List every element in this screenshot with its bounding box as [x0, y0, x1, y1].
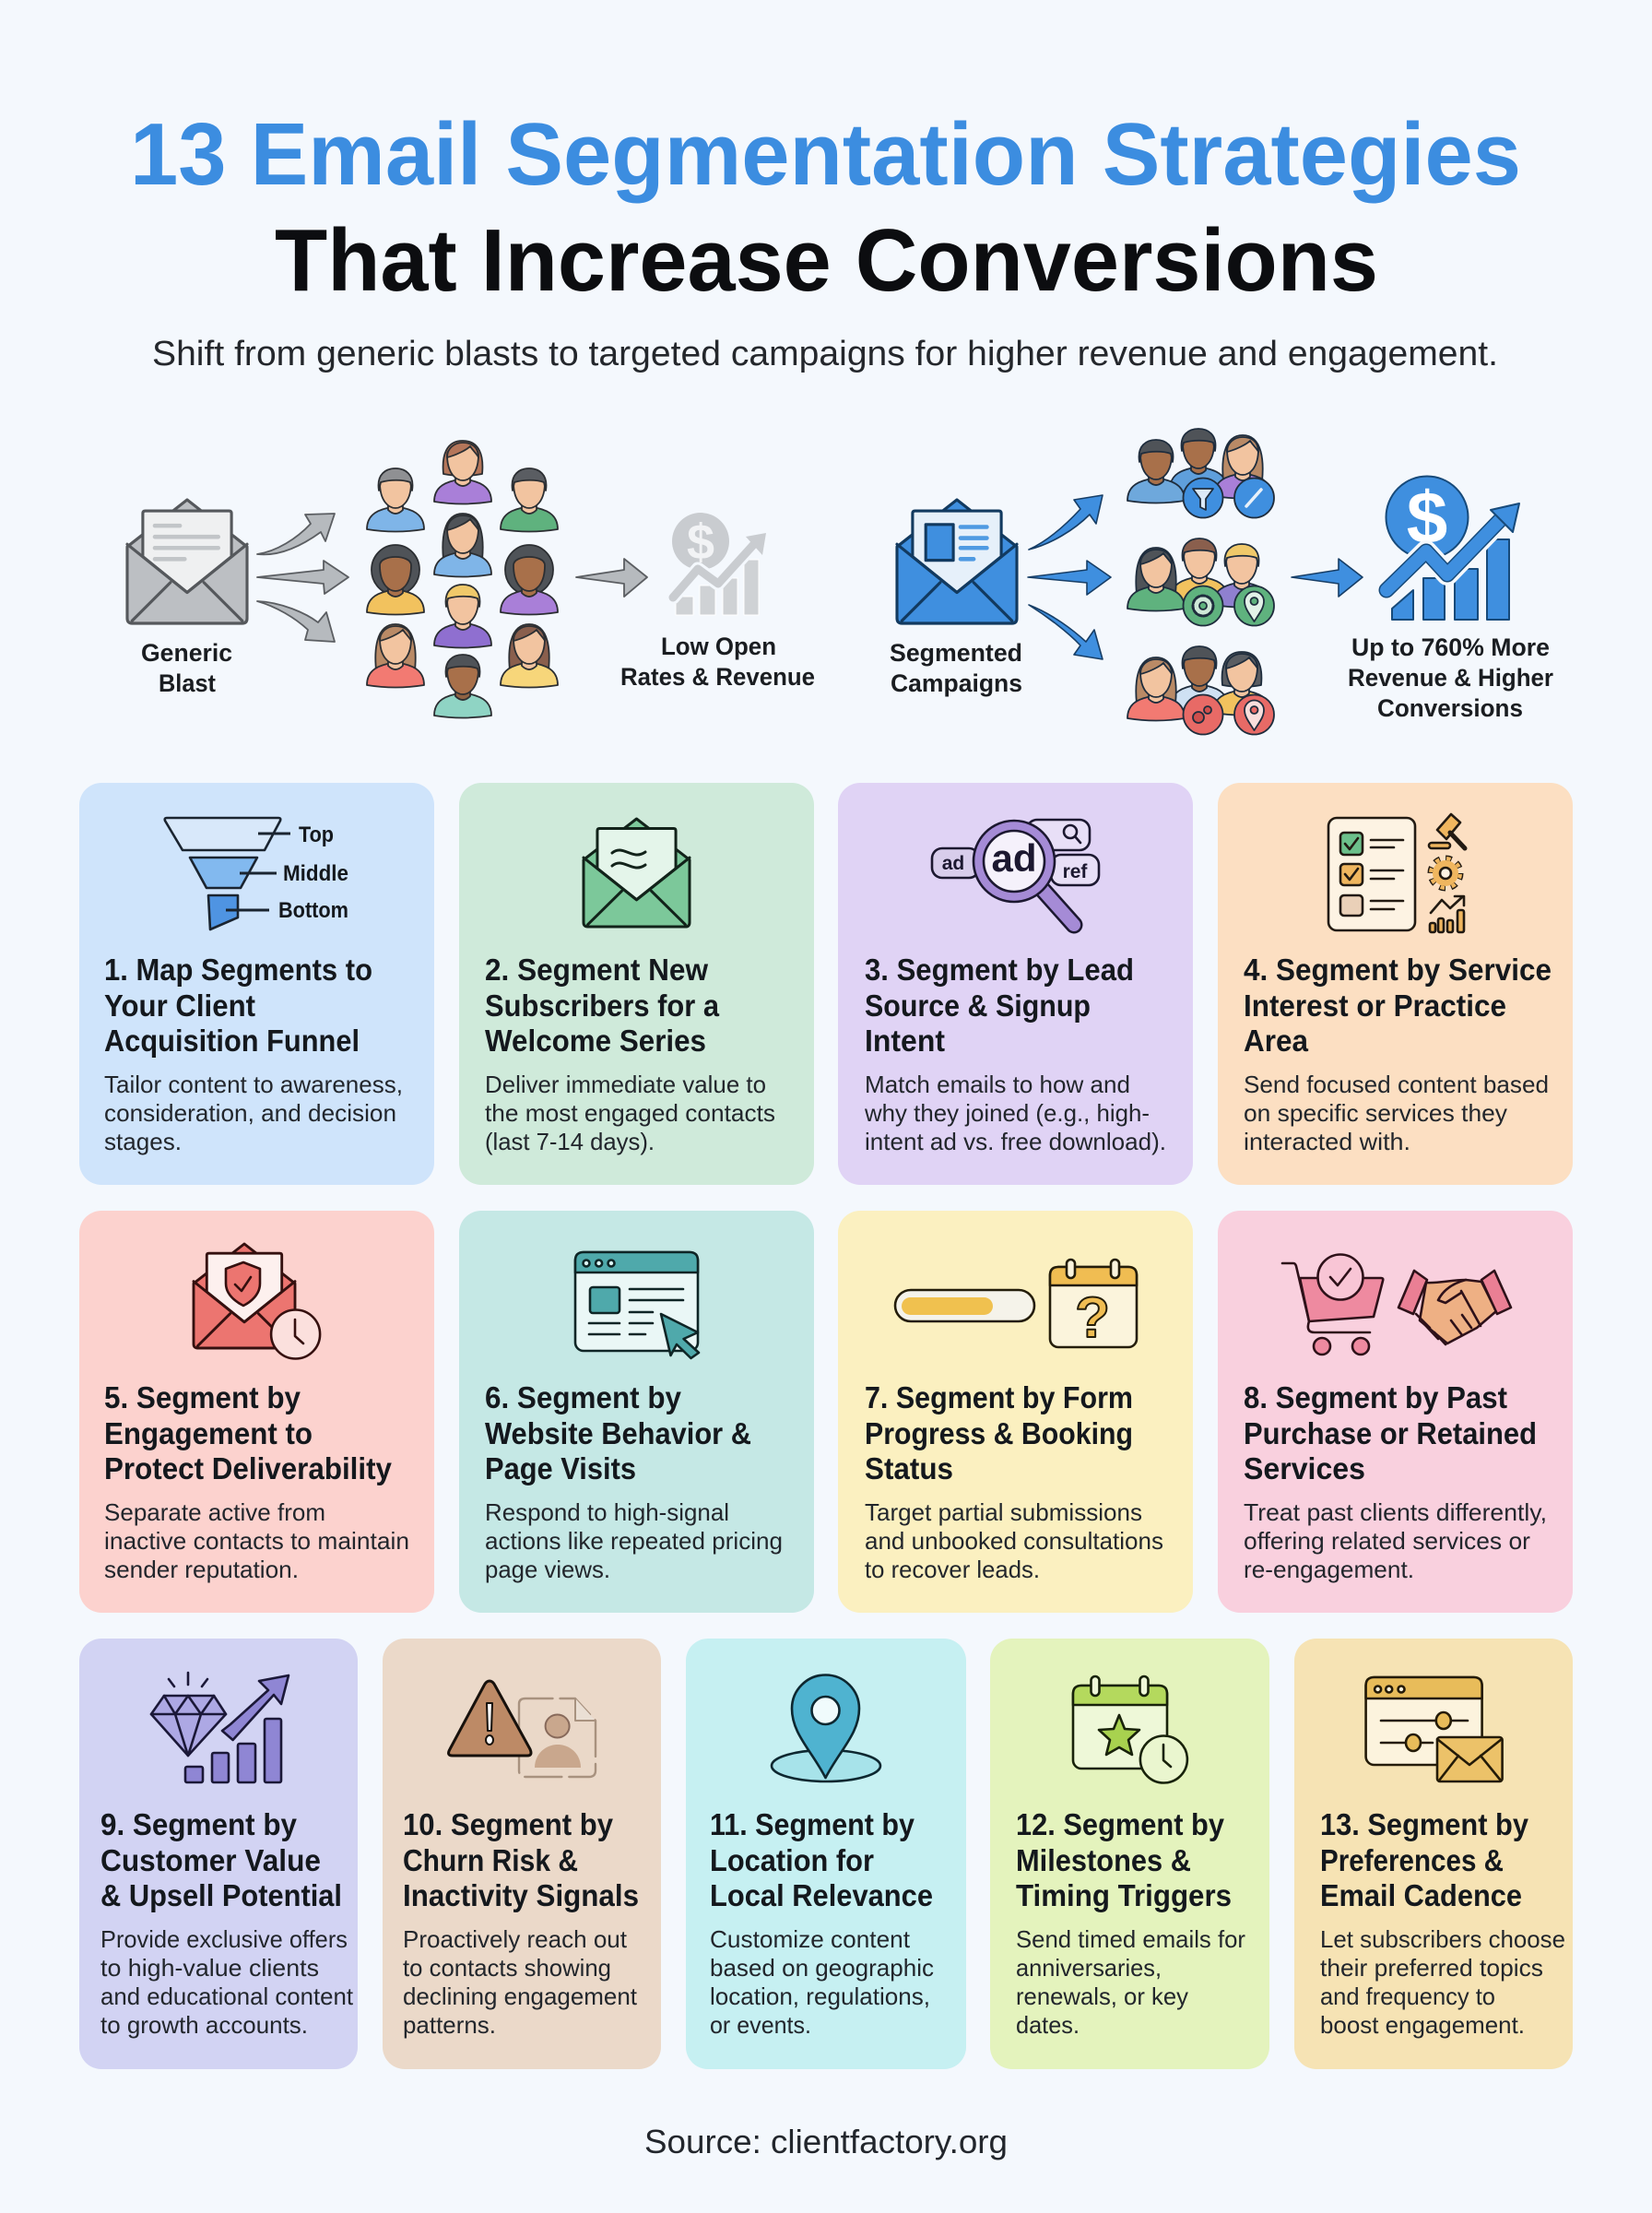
heading: 10. Segment by	[403, 1807, 614, 1841]
heading: Welcome Series	[485, 1024, 706, 1058]
icon: blue revenue chart: $	[1407, 477, 1447, 559]
text block	[1244, 1498, 1547, 1583]
arrow: blue to result	[1292, 559, 1363, 597]
text block	[485, 1071, 775, 1155]
icon: cart and handshake	[1282, 1254, 1511, 1355]
heading: Progress & Booking	[865, 1416, 1133, 1450]
heading: Customer Value	[100, 1843, 321, 1877]
heading	[403, 1807, 639, 1912]
text block: Customize content	[710, 1925, 911, 1953]
text block: to recover leads.	[865, 1556, 1040, 1583]
text block: re-engagement.	[1244, 1556, 1414, 1583]
text block	[1016, 1925, 1245, 2039]
icon: funnel: Middle	[283, 861, 348, 886]
icon: progress bar and calendar	[895, 1260, 1137, 1350]
label: generic blast	[141, 639, 232, 697]
subtitle: Shift from generic blasts to targeted campaigns for higher revenue and engagement.	[152, 335, 1498, 373]
text block: Provide exclusive offers	[100, 1925, 348, 1953]
label: up to 760% more: Revenue & Higher	[1348, 664, 1553, 692]
heading: Acquisition Funnel	[104, 1024, 360, 1058]
text block: location, regulations,	[710, 1982, 930, 2010]
text block: actions like repeated pricing	[485, 1527, 783, 1555]
heading: Churn Risk &	[403, 1843, 578, 1877]
text block: based on geographic	[710, 1954, 934, 1982]
heading: Timing Triggers	[1016, 1878, 1232, 1912]
title	[130, 105, 1521, 310]
text block: why they joined (e.g., high-	[864, 1099, 1150, 1127]
text block: offering related services or	[1244, 1527, 1530, 1555]
text block: Let subscribers choose	[1320, 1925, 1565, 1953]
text block	[1320, 1925, 1565, 2039]
heading: Email Cadence	[1320, 1878, 1522, 1912]
heading	[710, 1807, 933, 1912]
text block: and unbooked consultations	[865, 1527, 1163, 1555]
heading	[485, 953, 720, 1058]
text block: sender reputation.	[104, 1556, 299, 1583]
label: low open rates: Rates & Revenue	[620, 663, 815, 691]
panel: card 13	[1294, 1639, 1573, 2069]
icon: magnifier with ad tags: ad	[991, 836, 1037, 880]
label: low open rates: Low Open	[661, 633, 776, 660]
text block: interacted with.	[1244, 1128, 1410, 1155]
label: up to 760% more: Up to 760% More	[1351, 633, 1550, 661]
text block: renewals, or key	[1016, 1982, 1188, 2010]
panel: card 3	[838, 783, 1193, 1185]
label: generic blast: Blast	[159, 669, 216, 697]
heading: 6. Segment by	[485, 1380, 682, 1414]
heading	[100, 1807, 342, 1912]
heading	[104, 953, 372, 1058]
heading	[1320, 1807, 1529, 1912]
icon: gray revenue chart	[672, 513, 766, 615]
heading	[865, 1380, 1133, 1485]
people group: middle segment	[1127, 538, 1274, 625]
panel: card 12	[990, 1639, 1269, 2069]
icon: green envelope	[584, 819, 690, 927]
text block: to growth accounts.	[100, 2011, 308, 2039]
people group: top segment	[1127, 429, 1274, 518]
text block	[710, 1925, 934, 2039]
panel: card 2	[459, 783, 814, 1185]
heading	[865, 953, 1134, 1058]
text block	[104, 1071, 403, 1155]
heading: 9. Segment by	[100, 1807, 298, 1841]
text block: or events.	[710, 2011, 811, 2039]
heading	[1016, 1807, 1232, 1912]
text block: Send focused content based	[1244, 1071, 1549, 1098]
heading: Website Behavior &	[485, 1416, 751, 1450]
panel: card 10	[383, 1639, 661, 2069]
text block	[100, 1925, 354, 2039]
panel: card 1	[79, 783, 434, 1185]
label: up to 760% more	[1348, 633, 1553, 722]
arrow: gray to result	[576, 559, 647, 597]
source footer: Source: clientfactory.org	[644, 2123, 1008, 2160]
heading: Engagement to	[104, 1416, 313, 1450]
icon: location pin	[772, 1675, 880, 1781]
text block: Deliver immediate value to	[485, 1071, 766, 1098]
heading: Milestones &	[1016, 1843, 1191, 1877]
heading: Status	[865, 1451, 953, 1485]
icon: checklist with gavel, gear, chart	[1328, 814, 1465, 932]
heading	[1244, 1380, 1537, 1485]
heading: 5. Segment by	[104, 1380, 301, 1414]
text block	[104, 1498, 409, 1583]
text block: Respond to high-signal	[485, 1498, 729, 1526]
title: 13 Email Segmentation Strategies	[130, 105, 1521, 204]
text block: dates.	[1016, 2011, 1080, 2039]
heading	[485, 1380, 751, 1485]
icon: magnifier with ad tags	[932, 820, 1099, 925]
heading: 12. Segment by	[1016, 1807, 1225, 1841]
heading: 1. Map Segments to	[104, 953, 372, 987]
icon: magnifier with ad tags: ad	[942, 853, 964, 874]
heading: Purchase or Retained	[1244, 1416, 1537, 1450]
heading: Protect Deliverability	[104, 1451, 393, 1485]
diagram: segmented campaigns	[890, 429, 1553, 734]
text block: Treat past clients differently,	[1244, 1498, 1547, 1526]
text block: the most engaged contacts	[485, 1099, 775, 1127]
icon: calendar with star and clock	[1073, 1676, 1187, 1783]
panel: card 5	[79, 1211, 434, 1613]
text block: anniversaries,	[1016, 1954, 1162, 1982]
text block: declining engagement	[403, 1982, 638, 2010]
heading: Preferences &	[1320, 1843, 1504, 1877]
text block: Target partial submissions	[865, 1498, 1142, 1526]
heading: Location for	[710, 1843, 874, 1877]
heading: 2. Segment New	[485, 953, 708, 987]
heading	[1244, 953, 1552, 1058]
label: low open rates	[620, 633, 815, 691]
heading: Page Visits	[485, 1451, 636, 1485]
text block: Tailor content to awareness,	[104, 1071, 403, 1098]
text block: on specific services they	[1244, 1099, 1507, 1127]
arrows: gray fan-out	[257, 514, 348, 642]
text block: and educational content	[100, 1982, 354, 2010]
heading: Subscribers for a	[485, 988, 720, 1023]
heading: Inactivity Signals	[403, 1878, 639, 1912]
label: up to 760% more: Conversions	[1377, 694, 1523, 722]
icon: funnel: Bottom	[278, 898, 348, 923]
heading: Services	[1244, 1451, 1365, 1485]
heading: Source & Signup	[865, 988, 1091, 1023]
text block: page views.	[485, 1556, 610, 1583]
heading	[104, 1380, 393, 1485]
text block	[403, 1925, 638, 2039]
label: generic blast: Generic	[141, 639, 232, 667]
text block: patterns.	[403, 2011, 496, 2039]
text block: consideration, and decision	[104, 1099, 396, 1127]
arrows: blue fan-out	[1028, 495, 1111, 659]
label: segmented campaigns	[890, 639, 1022, 697]
text block: intent ad vs. free download).	[865, 1128, 1166, 1155]
heading: 11. Segment by	[710, 1807, 915, 1841]
panel: card 6	[459, 1211, 814, 1613]
text block: to high-value clients	[100, 1954, 319, 1982]
icon: diamond with growth	[151, 1673, 289, 1782]
title: That Increase Conversions	[275, 211, 1378, 310]
text block	[1244, 1071, 1549, 1155]
text block: Separate active from	[104, 1498, 325, 1526]
heading: & Upsell Potential	[100, 1878, 342, 1912]
diagram: generic blast	[127, 441, 815, 717]
heading: Your Client	[104, 988, 255, 1023]
heading: Local Relevance	[710, 1878, 933, 1912]
icon: red envelope with shield and clock	[194, 1244, 320, 1359]
heading: Area	[1244, 1024, 1309, 1058]
icon: warning and fading contact	[449, 1681, 596, 1777]
heading: 7. Segment by Form	[865, 1380, 1133, 1414]
heading: Intent	[865, 1024, 945, 1058]
label: segmented campaigns: Campaigns	[891, 669, 1022, 697]
heading: 4. Segment by Service	[1244, 953, 1552, 987]
text block: (last 7-14 days).	[485, 1128, 655, 1155]
text block: boost engagement.	[1320, 2011, 1525, 2039]
panel: card 8	[1218, 1211, 1573, 1613]
heading: 8. Segment by Past	[1244, 1380, 1507, 1414]
panel: card 9	[79, 1639, 358, 2069]
panel: card 7	[838, 1211, 1193, 1613]
text block	[864, 1071, 1166, 1155]
heading: Interest or Practice	[1244, 988, 1506, 1023]
text block	[485, 1498, 783, 1583]
icon: funnel: Top	[299, 822, 334, 847]
heading: 13. Segment by	[1320, 1807, 1529, 1841]
icon: blue envelope	[897, 500, 1017, 623]
text block: Match emails to how and	[865, 1071, 1130, 1098]
panel: card 4	[1218, 783, 1573, 1185]
text block: stages.	[104, 1128, 182, 1155]
icon: magnifier with ad tags: ref	[1063, 861, 1088, 882]
icon: gray envelope	[127, 500, 247, 623]
icon: preferences window with envelope	[1366, 1677, 1503, 1781]
icon: progress bar and calendar: ?	[1075, 1286, 1110, 1350]
text block: Proactively reach out	[403, 1925, 628, 1953]
text block: Send timed emails for	[1016, 1925, 1245, 1953]
icon: funnel	[165, 818, 348, 929]
panel: card 11	[686, 1639, 966, 2069]
text block: inactive contacts to maintain	[104, 1527, 409, 1555]
people: generic audience	[367, 441, 558, 717]
icon: blue revenue chart	[1386, 476, 1519, 620]
text block: their preferred topics	[1320, 1954, 1543, 1982]
people group: bottom segment	[1127, 646, 1274, 734]
text block: and frequency to	[1320, 1982, 1495, 2010]
heading: 3. Segment by Lead	[865, 953, 1134, 987]
icon: browser with cursor	[575, 1252, 699, 1358]
text block	[865, 1498, 1163, 1583]
text block: to contacts showing	[403, 1954, 611, 1982]
icon: gray revenue chart: $	[687, 515, 714, 570]
label: segmented campaigns: Segmented	[890, 639, 1022, 667]
